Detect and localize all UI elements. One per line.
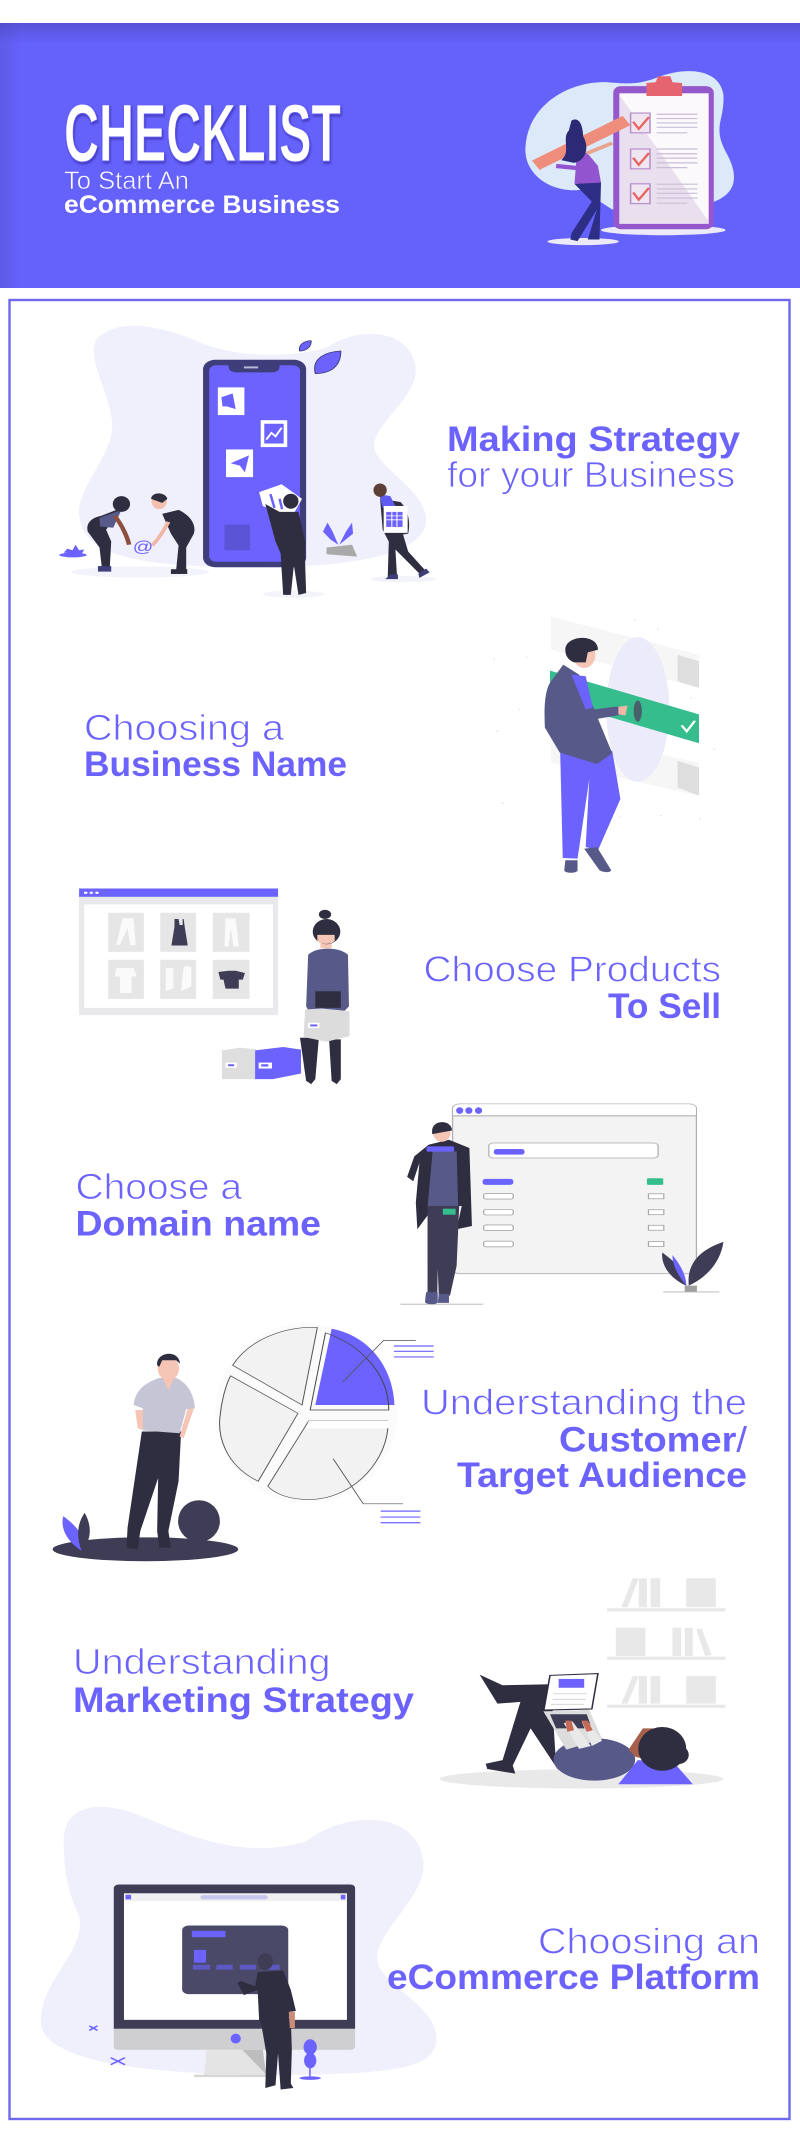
dots (493, 619, 715, 820)
heading: making strategy (447, 420, 741, 495)
floor, ball and plant (53, 1500, 238, 1561)
boxes (222, 1047, 301, 1079)
monitor (114, 1885, 355, 2077)
heading: making strategy: Making Strategy (447, 420, 741, 459)
heading: platform: Choosing an (538, 1920, 760, 1962)
heading: domain name: Domain name (76, 1204, 321, 1244)
section: making strategy illustration (59, 326, 436, 598)
title: CHECKLIST (64, 88, 341, 179)
section: customer illustration (53, 1323, 434, 1561)
reclining person with laptop (480, 1674, 693, 1784)
header banner (0, 23, 800, 288)
heading: marketing: Marketing Strategy (73, 1681, 415, 1720)
woman and man with at sign: @ (133, 537, 153, 555)
heading: domain name: Choose a (76, 1166, 243, 1207)
plant left (59, 545, 87, 557)
heading: business name: Business Name (84, 745, 347, 784)
heading: choose products: To Sell (608, 987, 721, 1026)
shelves (607, 1578, 726, 1708)
heading: business name: Choosing a (84, 707, 285, 748)
blob background (41, 1807, 436, 2075)
heading: making strategy: for your Business (447, 454, 735, 495)
phone (203, 360, 306, 567)
heading: customer: Customer / (559, 1420, 747, 1460)
floor (440, 1769, 723, 1788)
heading: business name (84, 707, 347, 784)
plant (662, 1242, 723, 1292)
man touching screen (237, 1953, 296, 2089)
small x marks (89, 2026, 125, 2065)
standing man (127, 1354, 195, 1549)
pie chart (215, 1323, 434, 1523)
seated woman (300, 910, 349, 1084)
heading: marketing: Understanding (73, 1641, 330, 1682)
panels (550, 617, 699, 796)
rock and plant (323, 523, 357, 557)
man with building card (373, 483, 430, 579)
section: products illustration (79, 888, 349, 1084)
heading: choose products: Choose Products (424, 948, 721, 990)
person with phone (401, 1122, 483, 1304)
heading: marketing (73, 1641, 415, 1720)
blob background (79, 326, 426, 567)
man with card on phone (259, 484, 306, 595)
browser window (79, 888, 278, 1015)
heading: customer: Target Audience (457, 1456, 747, 1495)
man pointing (545, 638, 628, 873)
title: To Start An (64, 167, 189, 195)
heading: choose products (424, 948, 721, 1026)
title: eCommerce Business (64, 191, 340, 219)
section: domain illustration (401, 1104, 723, 1304)
plant (299, 2039, 321, 2080)
heading: customer (421, 1382, 747, 1495)
section: marketing illustration (440, 1578, 726, 1788)
heading: domain name (76, 1166, 321, 1244)
woman and man with at sign (87, 493, 195, 574)
leaves (299, 341, 341, 374)
heading: customer: Understanding the (421, 1382, 747, 1422)
search browser window (453, 1104, 696, 1274)
icon: woman with pencil and clipboard (525, 71, 734, 245)
section: business name illustration (493, 617, 715, 873)
floor shadows (71, 566, 436, 598)
heading: platform: eCommerce Platform (387, 1958, 760, 1997)
title (64, 88, 341, 219)
heading: platform (387, 1920, 760, 1997)
section: platform illustration (41, 1807, 436, 2089)
